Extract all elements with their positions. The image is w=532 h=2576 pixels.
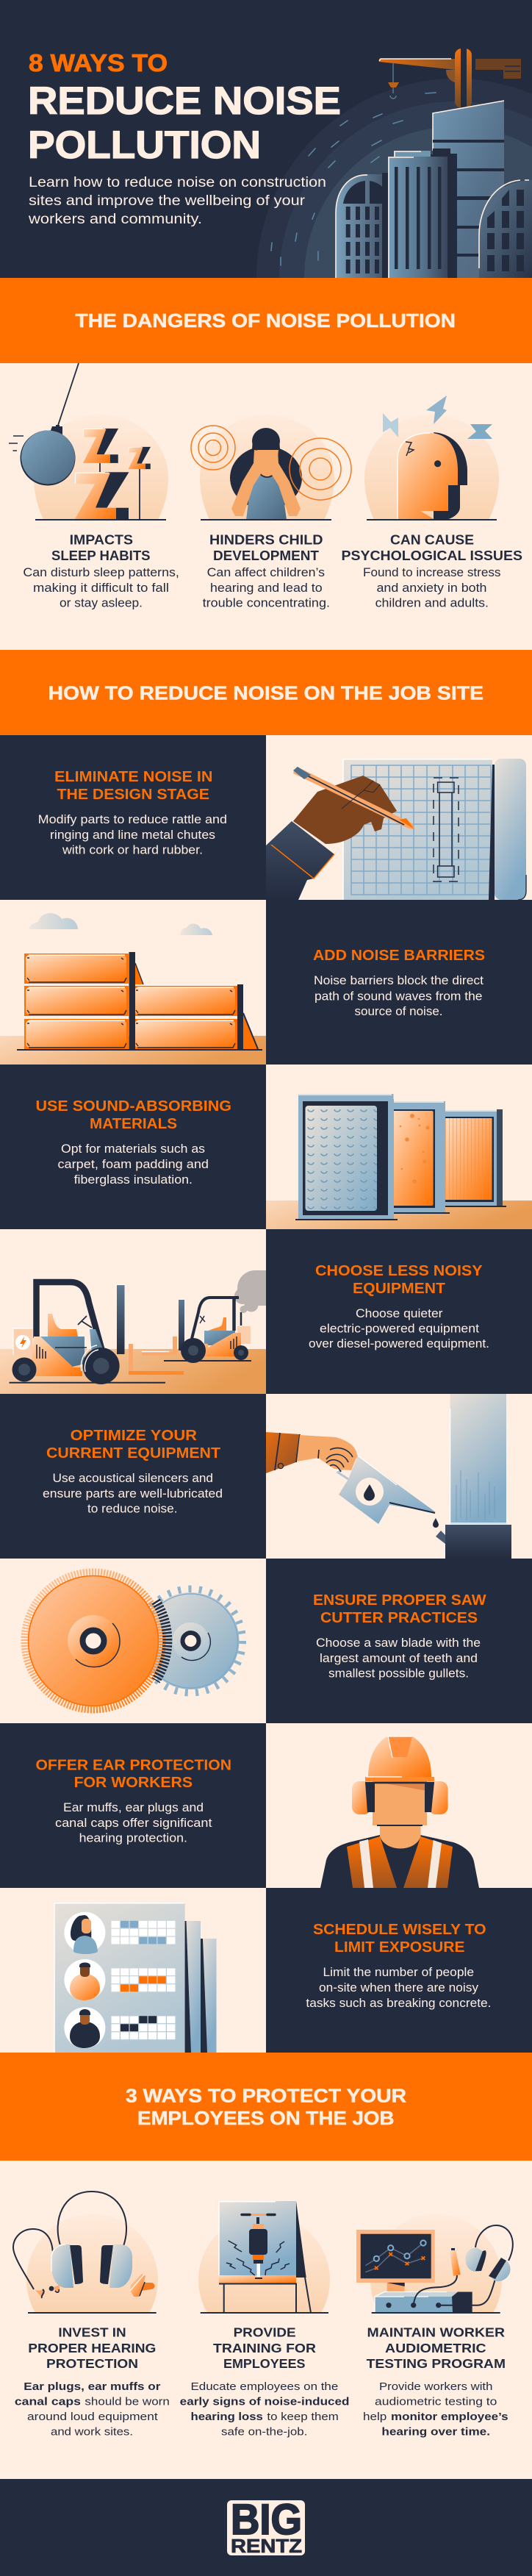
banner: protect employees: 3 WAYS TO PROTECT YOUR xyxy=(126,2085,406,2107)
illustration: oil can and machine xyxy=(266,1394,511,1559)
schedule row 2 xyxy=(64,1959,176,2000)
illustration: saw blades xyxy=(25,1573,241,1709)
machine column xyxy=(436,1394,511,1559)
arm and hand xyxy=(266,1432,357,1473)
step heading: SCHEDULE WISELY TO xyxy=(313,1922,486,1938)
card heading xyxy=(28,2325,156,2371)
card text: help xyxy=(363,2411,387,2423)
card heading: PROTECTION xyxy=(46,2356,138,2371)
icon: electric forklift xyxy=(9,1282,184,1384)
card heading: DEVELOPMENT xyxy=(213,548,320,563)
icon: wrecking ball xyxy=(9,363,79,485)
step heading xyxy=(54,769,213,803)
card heading: INVEST IN xyxy=(58,2325,126,2339)
step text: path of sound waves from the xyxy=(314,990,482,1003)
step heading: EQUIPMENT xyxy=(353,1281,445,1297)
step text xyxy=(314,974,484,1018)
card text: Can disturb sleep patterns, xyxy=(23,565,179,579)
illustration: noise barriers xyxy=(0,913,266,1065)
step text: Limit the number of people xyxy=(323,1966,474,1979)
illustration: worker with hard hat xyxy=(320,1736,479,1888)
step heading: LIMIT EXPOSURE xyxy=(334,1939,464,1956)
step text xyxy=(309,1307,489,1350)
icon: clouds xyxy=(29,913,212,935)
step text: Noise barriers block the direct xyxy=(314,974,484,987)
step heading: ADD NOISE BARRIERS xyxy=(313,948,485,964)
step text: Modify parts to reduce rattle and xyxy=(38,813,227,826)
card: hinders child development xyxy=(191,415,351,610)
intro text: sites and improve the wellbeing of your xyxy=(29,193,306,209)
step heading: OPTIMIZE YOUR xyxy=(71,1428,198,1444)
card text: canal caps xyxy=(15,2395,81,2408)
step 5: optimize current equipment xyxy=(0,1394,532,1559)
left arched building xyxy=(336,173,388,278)
banner: protect employees: EMPLOYEES ON THE JOB xyxy=(137,2107,394,2129)
step text: with cork or hard rubber. xyxy=(62,844,203,857)
step text: over diesel-powered equipment. xyxy=(309,1337,489,1350)
step heading: THE DESIGN STAGE xyxy=(57,787,209,803)
oil can xyxy=(338,1456,439,1528)
icon: monitor with chart xyxy=(356,2230,435,2291)
step text xyxy=(306,1966,491,2010)
illustration: schedule sheets xyxy=(54,1903,216,2053)
card heading xyxy=(213,2325,316,2371)
intro text: workers and community. xyxy=(28,212,202,227)
logo: RENTZ xyxy=(231,2535,302,2557)
logo: BIG xyxy=(231,2496,302,2544)
banner: how to reduce noise xyxy=(0,650,532,735)
card: psychological issues xyxy=(341,396,522,610)
step heading xyxy=(46,1428,220,1461)
card text: hearing over time. xyxy=(381,2425,490,2438)
panel: dangers xyxy=(0,363,532,650)
intro text xyxy=(28,175,326,227)
panel: protect employees xyxy=(0,2161,532,2479)
card text xyxy=(180,2380,350,2438)
step 1: eliminate noise in design xyxy=(0,735,532,900)
card heading: EMPLOYEES xyxy=(223,2356,306,2371)
step heading: ELIMINATE NOISE IN xyxy=(54,769,213,785)
footer xyxy=(0,2479,532,2576)
step text: source of noise. xyxy=(354,1005,442,1018)
card text xyxy=(363,2380,508,2438)
step heading: CUTTER PRACTICES xyxy=(320,1610,478,1626)
ear muffs xyxy=(352,1781,448,1814)
step text: Use acoustical silencers and xyxy=(53,1472,213,1485)
step text: Choose quieter xyxy=(356,1307,443,1320)
body and vest xyxy=(320,1835,479,1888)
card text: Provide workers with xyxy=(379,2380,492,2393)
card text: safe on-the-job. xyxy=(221,2425,307,2438)
card text xyxy=(363,565,501,610)
step text: tasks such as breaking concrete. xyxy=(306,1997,491,2010)
icon: earmuffs and earplugs xyxy=(13,2192,154,2298)
hero panel xyxy=(0,0,532,477)
card text xyxy=(203,565,330,610)
intro text: Learn how to reduce noise on construction xyxy=(29,175,326,190)
step text: ringing and line metal chutes xyxy=(50,829,215,842)
card: hearing protection xyxy=(13,2192,170,2438)
head xyxy=(373,1781,427,1848)
center building xyxy=(388,151,447,278)
icon: left sound rings xyxy=(191,426,235,470)
front panel xyxy=(295,1094,398,1220)
card heading xyxy=(51,532,150,563)
banner: the dangers xyxy=(0,278,532,363)
step text: fiberglass insulation. xyxy=(74,1173,193,1187)
card text: or stay asleep. xyxy=(60,596,143,610)
sound wave dashes xyxy=(271,93,436,265)
card heading: SLEEP HABITS xyxy=(51,548,150,563)
card text: Can affect children’s xyxy=(207,565,325,579)
card text xyxy=(15,2380,170,2438)
card heading: PSYCHOLOGICAL ISSUES xyxy=(341,548,522,563)
card heading xyxy=(209,532,323,563)
card text: hearing and lead to xyxy=(210,581,323,595)
step heading: CHOOSE LESS NOISY xyxy=(315,1263,483,1279)
card heading: PROVIDE xyxy=(234,2325,296,2339)
schedule row 1 xyxy=(64,1912,176,1954)
card heading: TRAINING FOR xyxy=(213,2341,316,2355)
step text xyxy=(316,1636,481,1681)
icon: headphones and plug xyxy=(414,2225,513,2305)
illustration: blueprint and hand xyxy=(266,759,526,900)
card text: Found to increase stress xyxy=(363,565,501,579)
title: POLLUTION xyxy=(28,124,261,167)
step heading: USE SOUND-ABSORBING xyxy=(35,1098,231,1115)
card text: Ear plugs, ear muffs or xyxy=(24,2380,161,2393)
step heading: FOR WORKERS xyxy=(74,1775,193,1791)
step 8: schedule wisely xyxy=(0,1888,532,2053)
card text xyxy=(23,565,179,610)
card heading: MAINTAIN WORKER xyxy=(367,2325,505,2339)
card text: should be worn xyxy=(85,2395,170,2408)
step heading: OFFER EAR PROTECTION xyxy=(35,1758,231,1774)
icon: right sound rings xyxy=(290,438,351,500)
step text: Ear muffs, ear plugs and xyxy=(63,1801,204,1814)
title: REDUCE NOISE xyxy=(28,79,341,123)
step heading: CURRENT EQUIPMENT xyxy=(46,1445,220,1461)
icon: audiometer device xyxy=(375,2292,472,2312)
step text: hearing protection. xyxy=(79,1832,187,1845)
card heading: IMPACTS xyxy=(70,532,133,548)
step 2: noise barriers xyxy=(0,900,532,1065)
card heading: AUDIOMETRIC xyxy=(385,2341,486,2355)
card text: children and adults. xyxy=(375,596,489,610)
card heading: HINDERS CHILD xyxy=(209,532,323,548)
card heading xyxy=(341,532,522,563)
card text: trouble concentrating. xyxy=(203,596,330,610)
card text: monitor employee’s xyxy=(391,2411,508,2423)
card heading: TESTING PROGRAM xyxy=(367,2356,506,2371)
step text: carpet, foam padding and xyxy=(57,1158,209,1171)
card text: Educate employees on the xyxy=(191,2380,338,2393)
step text xyxy=(57,1142,209,1187)
icon: lightning bolts xyxy=(383,396,492,439)
right panel xyxy=(441,1109,506,1206)
step 4: less noisy equipment xyxy=(0,1229,532,1394)
step 3: sound-absorbing materials xyxy=(0,1065,532,1229)
banner: protect employees xyxy=(0,2053,532,2161)
crane xyxy=(379,46,521,108)
concentric noise rings xyxy=(250,79,532,477)
step 7: ear protection xyxy=(0,1723,532,1888)
icon: head profile xyxy=(398,432,467,520)
step text: largest amount of teeth and xyxy=(320,1652,478,1665)
step text: on-site when there are noisy xyxy=(319,1981,479,1994)
small blade xyxy=(140,1590,241,1692)
card text: hearing loss xyxy=(191,2411,263,2423)
card text: making it difficult to fall xyxy=(33,581,169,595)
banner: the dangers: THE DANGERS OF NOISE POLLUTION xyxy=(75,310,456,332)
icon: diesel forklift xyxy=(142,1270,266,1363)
step heading xyxy=(35,1758,231,1791)
step text xyxy=(55,1801,212,1845)
card heading: CAN CAUSE xyxy=(390,532,474,548)
step text: electric-powered equipment xyxy=(320,1323,479,1336)
icon: person covering ears xyxy=(230,428,302,520)
step heading xyxy=(35,1098,231,1132)
step text xyxy=(38,813,227,857)
card text: around loud equipment xyxy=(27,2411,159,2423)
step 6: saw cutter practices xyxy=(0,1559,532,1723)
step text xyxy=(43,1472,223,1516)
step heading xyxy=(313,1922,486,1956)
card: audiometric testing xyxy=(356,2214,513,2438)
large blade xyxy=(25,1573,168,1709)
step text: smallest possible gullets. xyxy=(328,1667,469,1681)
card text: and anxiety in both xyxy=(376,581,486,595)
step heading xyxy=(315,1263,483,1297)
step heading: ENSURE PROPER SAW xyxy=(313,1592,486,1609)
tall building xyxy=(411,101,504,278)
icon: training board with jackhammer xyxy=(219,2201,311,2313)
step text: to reduce noise. xyxy=(87,1503,178,1516)
step text: Choose a saw blade with the xyxy=(316,1636,481,1650)
right arched building xyxy=(479,180,532,278)
schedule row 3 xyxy=(64,2007,176,2048)
step text: canal caps offer significant xyxy=(55,1817,212,1830)
card text: to keep them xyxy=(267,2411,339,2423)
middle panel xyxy=(389,1101,450,1213)
illustration: acoustic panels xyxy=(266,1094,532,1229)
card text: early signs of noise-induced xyxy=(180,2395,350,2408)
illustration: forklifts xyxy=(0,1270,266,1394)
title: 8 WAYS TO xyxy=(29,49,168,76)
banner: how to reduce noise: HOW TO REDUCE NOISE ON THE JOB SITE xyxy=(48,682,484,704)
card heading: PROPER HEARING xyxy=(28,2341,156,2355)
card text: audiometric testing to xyxy=(375,2395,497,2408)
card heading xyxy=(367,2325,506,2371)
icon: sleep letters xyxy=(75,429,151,520)
card: impacts sleep habits xyxy=(9,363,179,610)
step text: Opt for materials such as xyxy=(61,1142,205,1156)
title xyxy=(28,49,341,167)
card text: and work sites. xyxy=(51,2425,133,2438)
step heading: MATERIALS xyxy=(90,1116,177,1132)
step text: ensure parts are well-lubricated xyxy=(43,1487,223,1500)
hard hat xyxy=(365,1736,434,1781)
step heading xyxy=(313,1592,486,1626)
card: training xyxy=(180,2201,350,2438)
